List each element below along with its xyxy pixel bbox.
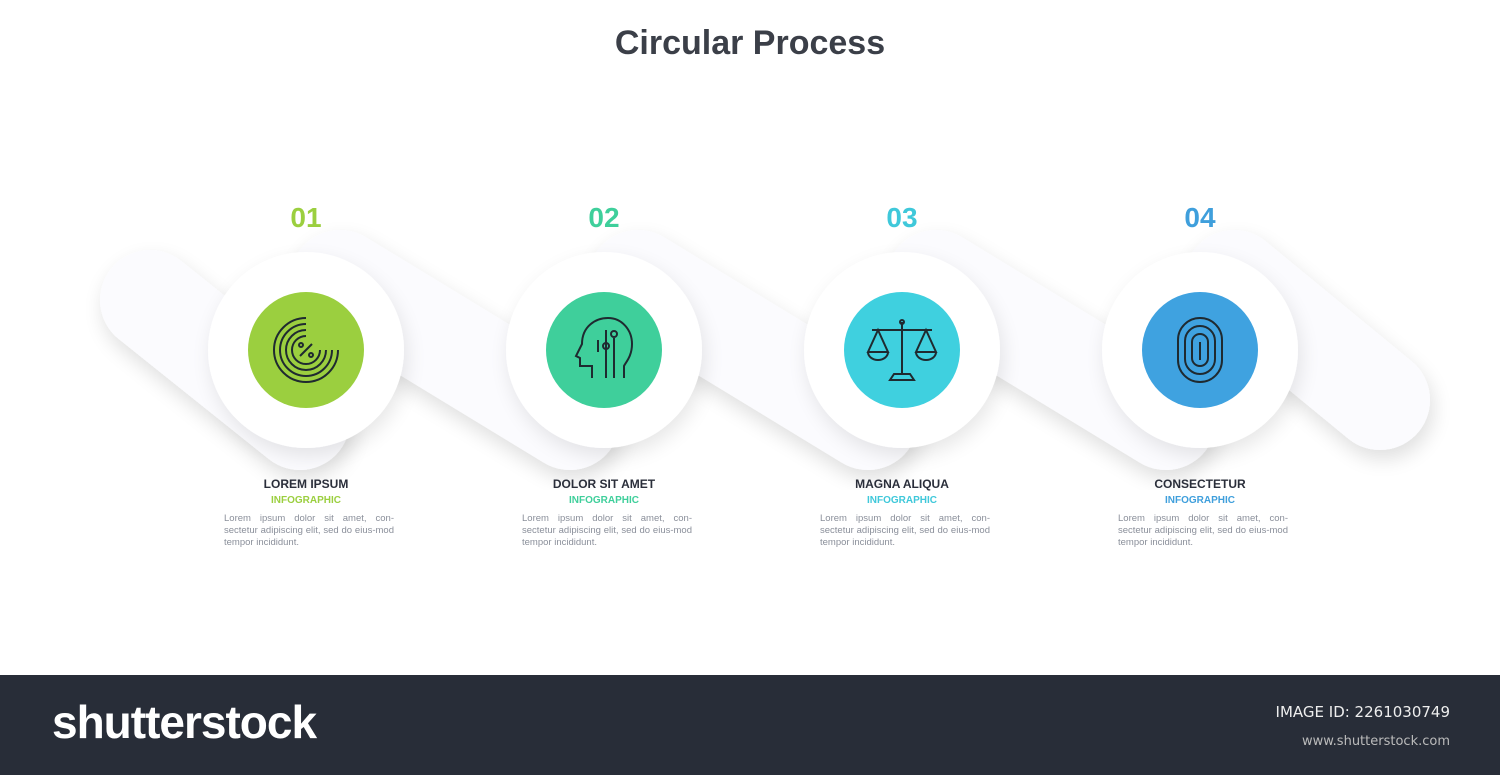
text: INFOGRAPHIC [867, 495, 937, 506]
text: Lorem ipsum dolor sit amet, con-sectetur adipiscing elit, sed do eius-mod tempor incididunt. [224, 513, 394, 548]
text: INFOGRAPHIC [271, 495, 341, 506]
icon: percent radar [248, 292, 364, 408]
text: INFOGRAPHIC [1165, 495, 1235, 506]
title: Circular Process [615, 24, 885, 62]
step 4 text [1118, 477, 1288, 548]
step 4 number: 04 [1184, 202, 1216, 233]
text: Lorem ipsum dolor sit amet, con-sectetur adipiscing elit, sed do eius-mod tempor incididunt. [1118, 513, 1288, 548]
icon: AI head [546, 292, 662, 408]
text: Lorem ipsum dolor sit amet, con-sectetur adipiscing elit, sed do eius-mod tempor incididunt. [820, 513, 990, 548]
step 2 number: 02 [588, 202, 620, 233]
text: DOLOR SIT AMET [553, 477, 655, 491]
footer url: www.shutterstock.com [1302, 734, 1450, 749]
icon: scales [844, 292, 960, 408]
text: MAGNA ALIQUA [855, 477, 949, 491]
step 1 number: 01 [290, 202, 322, 233]
footer bar [0, 675, 1500, 775]
footer logo: shutterstock [52, 696, 316, 748]
text: Lorem ipsum dolor sit amet, con-sectetur adipiscing elit, sed do eius-mod tempor incididunt. [522, 513, 692, 548]
icon: fingerprint [1142, 292, 1258, 408]
footer image id: IMAGE ID: 2261030749 [1276, 703, 1450, 721]
text: INFOGRAPHIC [569, 495, 639, 506]
text: LOREM IPSUM [264, 477, 348, 491]
step 1 text [224, 477, 394, 548]
text: CONSECTETUR [1154, 477, 1246, 491]
step 3 number: 03 [886, 202, 918, 233]
step 2 text [522, 477, 692, 548]
step 3 text [820, 477, 990, 548]
